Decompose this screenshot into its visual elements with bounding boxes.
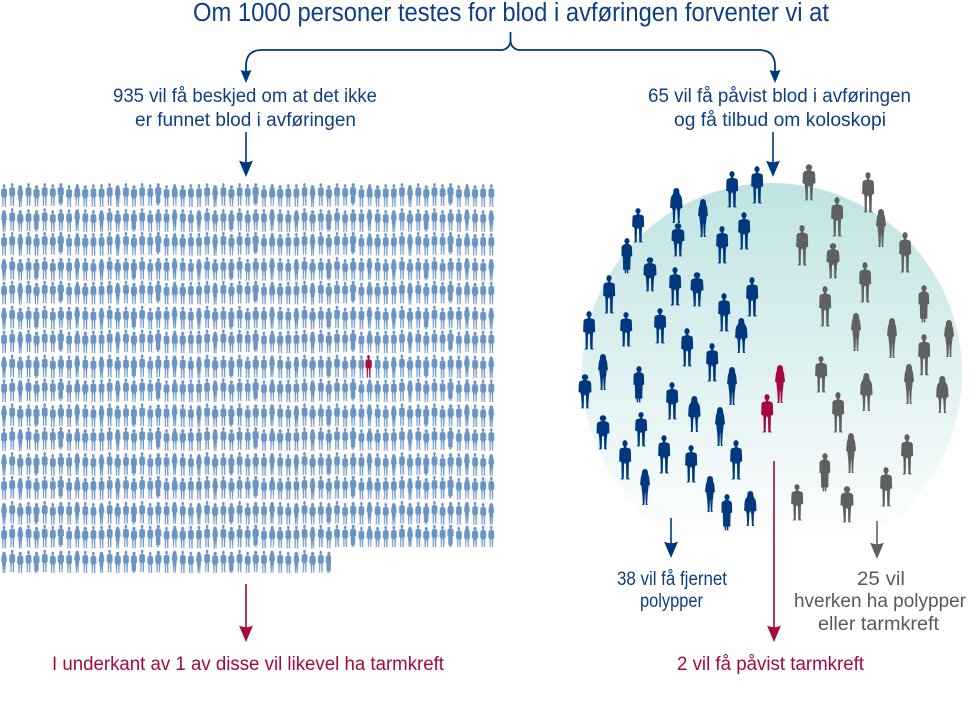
arrow: down to cancer text [768, 461, 780, 640]
arrow: branching bracket from title to both groups [240, 32, 780, 83]
text: neither caption: hverken ha polypper [794, 591, 967, 612]
icon: red person with cancer [365, 355, 372, 378]
people: 38 with polyps [578, 166, 763, 530]
text: neither caption: 25 vil [857, 569, 905, 590]
text: negative result group: er funnet blod i avføringen [135, 110, 356, 131]
text: negative result group: 935 vil få beskjed om at det ikke [113, 86, 377, 107]
arrow: down to polyps text [666, 518, 676, 556]
panel: circle background [582, 183, 962, 563]
text: positive result group: og få tilbud om koloskopi [674, 110, 886, 131]
text: left caption: I underkant av 1 av disse vil likevel ha tarmkreft [52, 654, 445, 675]
arrow: down from crowd to left caption [240, 584, 252, 640]
arrow: down to neither text [872, 521, 882, 557]
arrow: down to crowd [240, 132, 252, 175]
text: polyps caption: 38 vil få fjernet [617, 569, 728, 590]
text: neither caption: eller tarmkreft [818, 614, 940, 635]
text: cancer caption: 2 vil få påvist tarmkreft [677, 654, 865, 675]
chart: crowd of 935 people [0, 183, 501, 575]
people: 2 with cancer [761, 365, 785, 432]
people: 25 with neither polyps nor cancer [791, 164, 954, 522]
text: polyps caption: polypper [640, 591, 704, 612]
text: positive result group: 65 vil få påvist blod i avføringen [648, 86, 911, 107]
arrow: down to circle [768, 132, 778, 175]
